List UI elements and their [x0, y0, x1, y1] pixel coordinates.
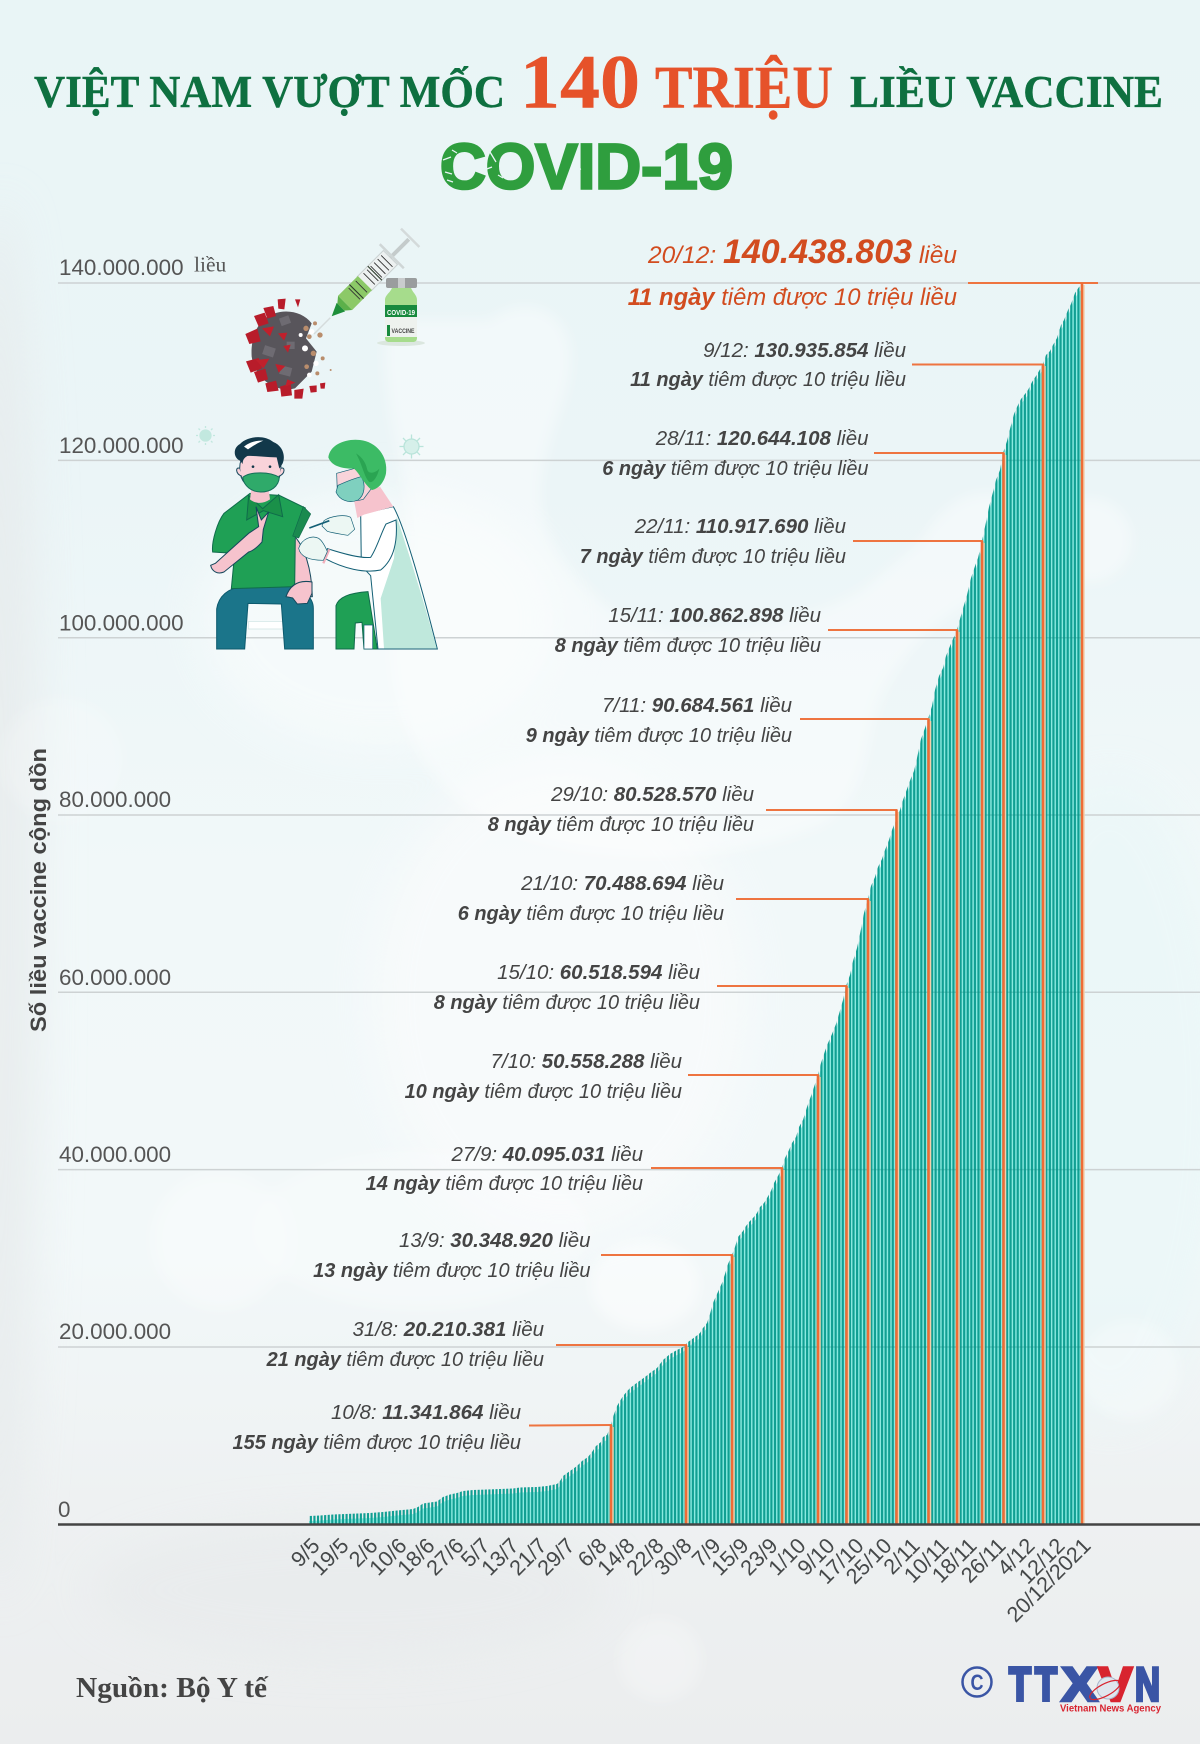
disintegrating fragments	[303, 321, 332, 375]
callout: 21/10: 21/10: 70.488.694 liều	[520, 872, 724, 895]
wordmark: N	[1135, 1658, 1160, 1710]
callout: 20/12	[628, 233, 1098, 1524]
x axis date labels: 26/11	[956, 1533, 1011, 1588]
x axis date labels: 9/5	[286, 1533, 325, 1572]
cap	[328, 440, 386, 490]
x axis date labels: 12/12	[1014, 1533, 1070, 1589]
wordmark: T	[1009, 1658, 1031, 1710]
callout: 29/10: 29/10: 80.528.570 liều	[550, 783, 754, 806]
title: 140	[520, 40, 640, 124]
upper glove	[322, 516, 355, 535]
x axis date labels: 2/6	[344, 1533, 383, 1572]
collar	[247, 495, 283, 520]
face	[240, 446, 281, 491]
illustration: vaccine vial	[377, 278, 425, 346]
callout: 21/10	[458, 872, 869, 1524]
callout: 31/8	[266, 1318, 687, 1524]
callout: 7/10: 10 ngày tiêm được 10 triệu liều	[405, 1081, 682, 1103]
callout: 13/9	[313, 1229, 733, 1524]
wrist band	[323, 549, 329, 563]
callout: 28/11: 28/11: 120.644.108 liều	[655, 427, 868, 450]
callout: 7/10: 7/10: 50.558.288 liều	[490, 1050, 682, 1073]
chair	[248, 622, 283, 629]
callout: 7/10	[405, 1050, 819, 1524]
callout: 15/10: 8 ngày tiêm được 10 triệu liều	[434, 992, 700, 1014]
x axis date labels: 4/12	[992, 1533, 1040, 1580]
x axis date labels: 6/8	[573, 1533, 612, 1572]
arm	[325, 520, 396, 571]
callout: 10/8	[233, 1401, 612, 1524]
x axis date labels: 20/12/2021	[1001, 1533, 1096, 1627]
x axis date labels: 10/11	[899, 1533, 954, 1588]
icon: small virus left	[196, 426, 215, 445]
face	[337, 466, 373, 501]
coat	[361, 507, 437, 649]
illustration: syringe	[302, 226, 422, 346]
y axis labels: 60.000.000	[59, 965, 171, 990]
y axis title: Số liều vaccine cộng dồn	[26, 748, 51, 1032]
callout: 10/8: 10/8: 11.341.864 liều	[331, 1401, 521, 1424]
wordmark: X	[1062, 1658, 1097, 1710]
x axis date labels: 18/11	[927, 1533, 982, 1588]
y axis labels	[58, 252, 226, 1522]
callout: 29/10: 8 ngày tiêm được 10 triệu liều	[488, 814, 754, 836]
wordmark: T	[1035, 1658, 1057, 1710]
title: COVID-19: COVID-19	[440, 130, 733, 202]
syringe	[309, 521, 329, 528]
x axis date labels: 19/5	[306, 1533, 354, 1580]
x axis date labels: 14/8	[592, 1533, 640, 1580]
callout: 28/11: 6 ngày tiêm được 10 triệu liều	[602, 458, 868, 480]
x axis date labels: 27/6	[421, 1533, 469, 1580]
x axis date labels: 18/6	[392, 1533, 440, 1580]
left arm with V sign	[211, 507, 269, 573]
coat shadow	[381, 517, 437, 648]
hair	[235, 437, 284, 469]
callout: 10/8: 155 ngày tiêm được 10 triệu liều	[233, 1432, 521, 1454]
outer spikes	[245, 299, 325, 399]
illustration: vaccine vial: VACCINE	[392, 328, 415, 335]
callout: 22/11: 22/11: 110.917.690 liều	[634, 515, 846, 538]
globe	[1087, 1677, 1123, 1703]
callout: 13/9: 13/9: 30.348.920 liều	[399, 1229, 590, 1252]
x axis date labels: 30/8	[649, 1533, 697, 1580]
virus body	[252, 311, 317, 389]
legs	[217, 585, 313, 649]
icon: small virus right	[400, 434, 424, 458]
x axis date labels: 25/10	[841, 1533, 897, 1589]
callout: 20/12: 20/12: 140.438.803 liều	[647, 233, 957, 271]
body texture	[262, 315, 295, 377]
neck	[353, 487, 393, 518]
eyes	[252, 465, 271, 468]
x axis date labels: 9/10	[792, 1533, 840, 1580]
callout: 31/8: 21 ngày tiêm được 10 triệu liều	[266, 1349, 544, 1371]
x axis date labels: 21/7	[504, 1533, 552, 1580]
callout: 7/11: 9 ngày tiêm được 10 triệu liều	[526, 725, 792, 747]
callout: 22/11	[580, 515, 983, 1524]
callout: 21/10: 6 ngày tiêm được 10 triệu liều	[458, 903, 724, 925]
callout: 15/11: 15/11: 100.862.898 liều	[608, 604, 821, 627]
mask	[243, 473, 279, 492]
right arm	[292, 537, 312, 598]
x axis date labels: 29/7	[532, 1533, 580, 1580]
source: Nguồn: Bộ Y tế	[76, 1673, 268, 1704]
callout: 15/10: 15/10: 60.518.594 liều	[497, 961, 700, 984]
ears	[237, 468, 284, 476]
illustration: vaccine vial: COVID-19	[387, 308, 415, 317]
x axis date labels: 5/7	[456, 1533, 495, 1572]
hand on knee	[286, 581, 312, 604]
y axis labels: 20.000.000	[59, 1319, 171, 1344]
x axis date labels: 13/7	[476, 1533, 524, 1580]
callout: 27/9: 27/9: 40.095.031 liều	[450, 1143, 643, 1166]
logo: TTXVN: Vietnam News Agency	[1060, 1702, 1161, 1714]
x axis date labels	[286, 1533, 1096, 1627]
y axis labels: 0	[58, 1497, 70, 1522]
shirt	[212, 493, 305, 589]
callout: 7/11	[526, 694, 930, 1524]
callout: 20/12: 11 ngày tiêm được 10 triệu liều	[628, 284, 957, 311]
callout: 7/11: 7/11: 90.684.561 liều	[602, 694, 792, 717]
title: TRIỆU	[655, 54, 833, 120]
y axis labels: 120.000.000	[59, 433, 184, 458]
x axis	[58, 1523, 1200, 1526]
x axis date labels: 2/11	[878, 1533, 925, 1579]
callout: 9/12	[630, 339, 1044, 1524]
x axis date labels: 22/8	[621, 1533, 669, 1580]
y axis labels: 100.000.000	[59, 610, 184, 636]
illustration: man receiving vaccine	[211, 437, 313, 649]
x axis date labels: 7/9	[687, 1533, 726, 1572]
chair back	[364, 625, 373, 649]
callout: 28/11	[602, 427, 1004, 1524]
callout: 31/8: 31/8: 20.210.381 liều	[352, 1318, 544, 1341]
title: VIỆT NAM VƯỢT MỐC	[34, 67, 505, 117]
logo: TTXVN	[962, 1658, 1161, 1714]
copyright mark	[962, 1668, 992, 1696]
x axis date labels: 17/10	[813, 1533, 869, 1589]
callout: 22/11: 7 ngày tiêm được 10 triệu liều	[580, 546, 846, 568]
callout: 27/9: 14 ngày tiêm được 10 triệu liều	[366, 1173, 643, 1195]
gridlines	[58, 283, 1200, 1347]
callout: 15/11: 8 ngày tiêm được 10 triệu liều	[555, 635, 821, 657]
illustration: nurse giving vaccine	[299, 440, 437, 649]
x axis date labels: 15/9	[706, 1533, 754, 1580]
x axis date labels: 1/10	[763, 1533, 811, 1580]
y axis labels: 40.000.000	[59, 1142, 171, 1167]
inner spikes	[256, 326, 295, 387]
callout: 9/12: 9/12: 130.935.854 liều	[703, 339, 906, 362]
copyright mark: C	[970, 1670, 984, 1695]
y axis labels: 80.000.000	[59, 787, 171, 812]
y axis labels: 140.000.000	[59, 255, 184, 280]
illustration: coronavirus	[245, 299, 332, 399]
wordmark: V	[1099, 1658, 1133, 1710]
lower glove	[299, 537, 327, 560]
callout: 15/11	[555, 604, 958, 1524]
callout: 13/9: 13 ngày tiêm được 10 triệu liều	[313, 1260, 590, 1282]
x axis date labels: 23/9	[735, 1533, 783, 1580]
sleeve	[293, 507, 311, 538]
callout: 9/12: 11 ngày tiêm được 10 triệu liều	[630, 369, 906, 391]
pants	[336, 592, 377, 649]
x axis date labels: 10/6	[364, 1533, 412, 1580]
mask	[336, 477, 364, 502]
wordmark	[1009, 1658, 1160, 1710]
y axis labels: liều	[194, 252, 226, 276]
callout: 15/10	[434, 961, 848, 1524]
callout: 29/10	[488, 783, 898, 1524]
bar chart: cumulative doses	[309, 280, 1084, 1524]
callout: 27/9	[366, 1143, 783, 1524]
title: LIỀU VACCINE	[850, 67, 1163, 117]
neck	[250, 487, 270, 503]
title	[34, 40, 1163, 124]
